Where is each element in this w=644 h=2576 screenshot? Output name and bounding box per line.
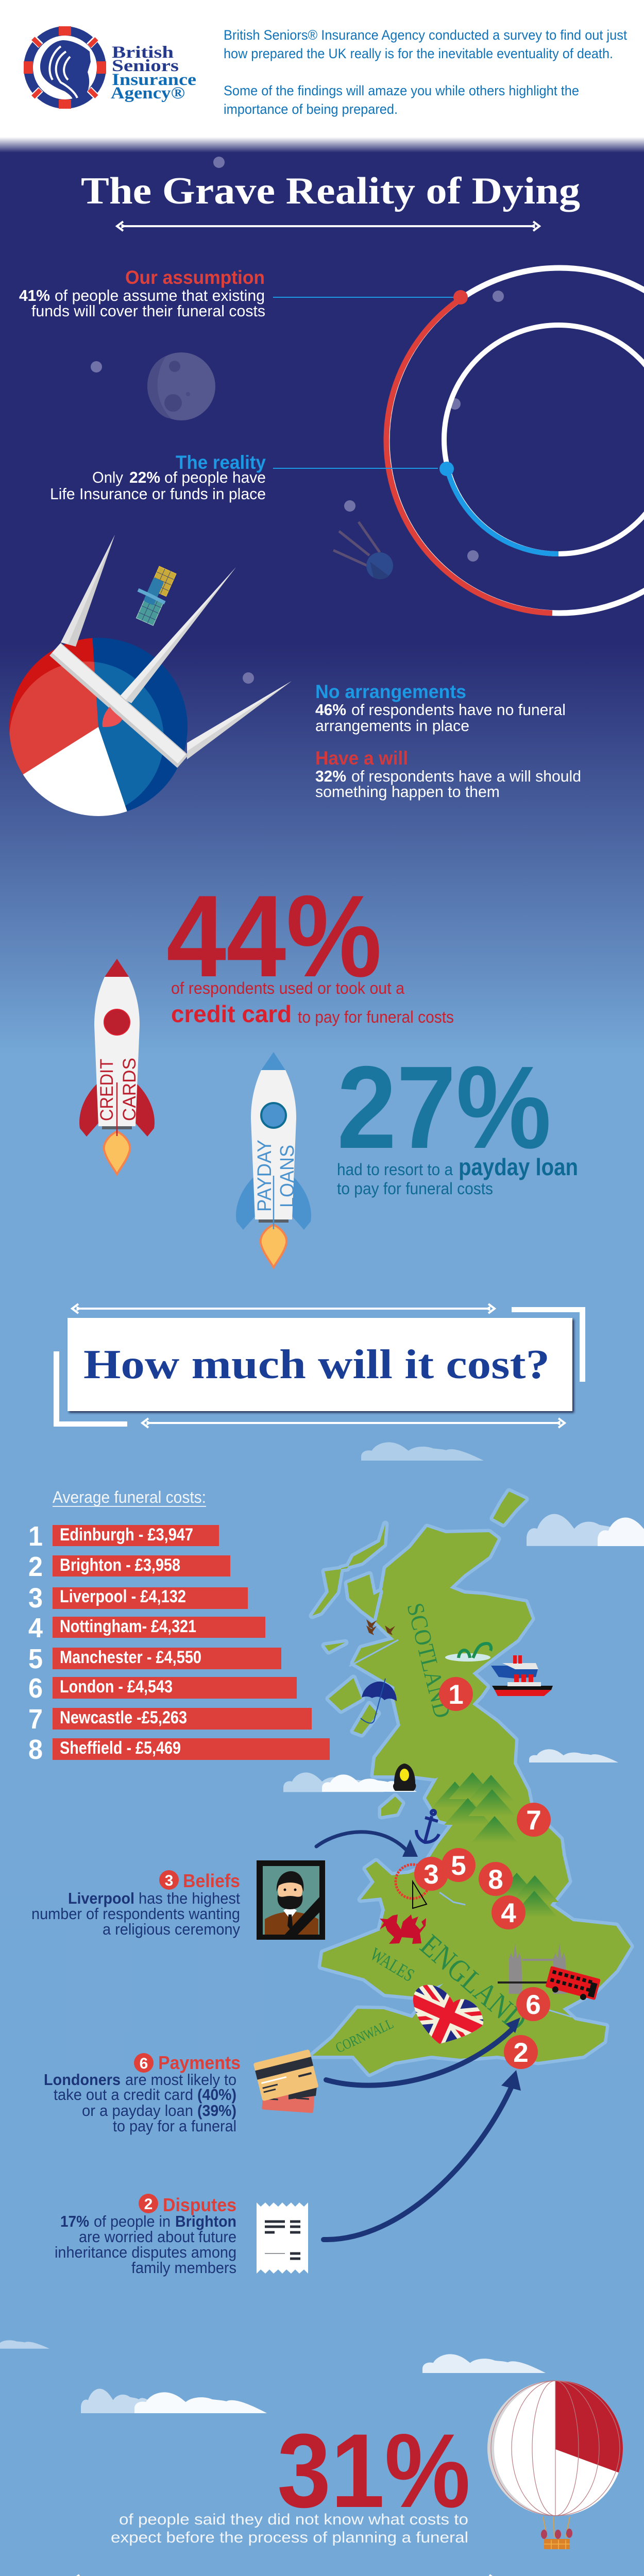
stat: 44 percent credit card <box>166 871 454 1027</box>
icon: credit cards rocket <box>79 959 155 1174</box>
heading panel: How much will it cost? <box>54 1304 585 1428</box>
icon: payday loans rocket <box>236 1052 311 1267</box>
callout: disputes: 17% <box>60 2212 89 2230</box>
bar: Sheffield <box>28 1734 330 1765</box>
icon: police helmet <box>393 1764 416 1791</box>
stat: 31 percent: of people said they did not know what costs to <box>119 2511 468 2528</box>
city markers: 2 <box>513 2038 529 2068</box>
label: SCOTLAND: SCOTLAND <box>402 1600 456 1721</box>
text: the reality: of people have <box>164 468 266 486</box>
callout: payments: 6 <box>140 2055 148 2072</box>
city markers: 6 <box>526 1990 541 2020</box>
stat: 27 percent payday loan: payday loan <box>459 1154 578 1180</box>
text: have a will <box>315 748 581 801</box>
bar: Newcastle <box>28 1704 312 1735</box>
label: CORNWALL: CORNWALL <box>333 2016 396 2056</box>
icon: nessie <box>459 1643 491 1658</box>
icon: umbrella <box>361 1679 397 1723</box>
icon: birds <box>366 1619 395 1635</box>
text: our assumption: Our assumption <box>125 267 265 288</box>
icon: satellite <box>136 566 176 625</box>
text: the reality <box>50 452 266 503</box>
arrow: to Liverpool <box>316 1832 418 1857</box>
text: our assumption <box>19 267 265 320</box>
bar: Edinburgh: 1 <box>28 1521 43 1552</box>
callout: beliefs: a religious ceremony <box>103 1920 240 1938</box>
callout: disputes: 2 <box>144 2196 152 2213</box>
callout: payments <box>44 2052 241 2135</box>
text: no arrangements: No arrangements <box>315 681 466 702</box>
icon: anchor <box>416 1810 439 1842</box>
bar: Manchester: 5 <box>28 1643 43 1674</box>
bar: Newcastle: 7 <box>28 1704 43 1735</box>
city markers <box>414 1677 551 2069</box>
icon: credit cards rocket: CARDS <box>120 1058 140 1121</box>
stat: 44 percent credit card: 44% <box>166 871 382 1001</box>
text: the reality: Life Insurance or funds in place <box>50 485 266 503</box>
callout: payments: (40%) <box>197 2086 236 2104</box>
city markers: 1 <box>448 1680 464 1710</box>
callout: disputes <box>55 2194 236 2277</box>
bar: Nottingham: Nottingham- £4,321 <box>60 1617 196 1636</box>
stat: 31 percent: 31% <box>277 2412 470 2530</box>
callout: disputes: Disputes <box>163 2194 236 2215</box>
icon: memorial portrait <box>257 1860 325 1940</box>
icon: london bus <box>545 1966 601 2003</box>
icon: welsh dragon <box>380 1914 426 1944</box>
clouds around map <box>361 1442 644 1762</box>
title: The Grave Reality of Dying: The Grave Reality of Dying <box>81 170 580 212</box>
text: have a will: Have a will <box>315 748 408 769</box>
callout: beliefs: Beliefs <box>183 1870 240 1891</box>
header: logo: Agency® <box>111 84 185 103</box>
stat: 27 percent payday loan: to pay for funeral costs <box>337 1179 493 1198</box>
stat: 27 percent payday loan: 27% <box>337 1042 551 1173</box>
bar: Liverpool <box>28 1583 248 1614</box>
header: logo <box>24 26 196 109</box>
callout: payments: to pay for a funeral <box>113 2117 236 2135</box>
decorative stars and moon <box>91 157 504 684</box>
label: ENGLAND: ENGLAND <box>414 1928 533 2038</box>
callout: disputes: are worried about future <box>79 2228 236 2246</box>
text: the reality: Only <box>92 468 123 486</box>
header: intro text <box>224 27 627 117</box>
text: the reality: The reality <box>176 452 266 473</box>
text: average funeral costs: Average funeral costs: <box>53 1488 206 1506</box>
callout: disputes: inheritance disputes among <box>55 2243 236 2261</box>
text: our assumption: funds will cover their funeral costs <box>31 302 265 320</box>
callout: disputes: family members <box>131 2259 236 2277</box>
heading panel: Popular send offs <box>55 2575 586 2576</box>
bar: Brighton <box>28 1551 230 1582</box>
header: logo: Insurance <box>112 71 196 89</box>
clouds above balloon <box>0 2337 546 2413</box>
callout: payments: (39%) <box>197 2102 236 2120</box>
callout: disputes: Brighton <box>175 2212 236 2230</box>
bar: Liverpool: Liverpool - £4,132 <box>60 1587 186 1606</box>
bar: Sheffield: Sheffield - £5,469 <box>60 1738 181 1758</box>
bar: Newcastle: Newcastle -£5,263 <box>60 1708 187 1727</box>
title: The Grave Reality of Dying <box>81 170 580 231</box>
text: the reality: 22% <box>129 468 160 486</box>
bar: Edinburgh <box>28 1521 219 1552</box>
bar chart: costs by city <box>28 1521 330 1765</box>
text: no arrangements: of respondents have no funeral <box>351 701 566 719</box>
label: WALES: WALES <box>367 1944 418 1986</box>
icon: hot air balloon pie <box>487 2380 623 2549</box>
rings chart: assumption vs reality <box>273 268 644 613</box>
text: our assumption: 41% <box>19 286 50 304</box>
callout: beliefs <box>31 1870 240 1938</box>
city markers: 7 <box>526 1805 541 1836</box>
icon: credit cards rocket: CREDIT <box>97 1059 117 1121</box>
stat: 31 percent <box>111 2412 470 2546</box>
text: have a will: something happen to them <box>315 783 500 801</box>
header: intro text: importance of being prepared. <box>224 101 398 117</box>
callout: beliefs: 3 <box>165 1872 173 1889</box>
bar: Brighton: Brighton - £3,958 <box>60 1555 180 1575</box>
text: have a will: 32% <box>315 767 346 785</box>
city markers: 4 <box>501 1898 516 1928</box>
icon: union jack heart <box>413 1985 483 2044</box>
stat: 27 percent payday loan: had to resort to a <box>337 1160 453 1179</box>
callout: disputes: of people in <box>94 2212 171 2230</box>
bar: Brighton: 2 <box>28 1551 43 1582</box>
bar: London: 6 <box>28 1673 43 1704</box>
chart: satellite dish pie <box>9 535 292 816</box>
icon: london eye <box>396 1865 430 1908</box>
city markers: 5 <box>451 1851 466 1881</box>
bar: Sheffield: 8 <box>28 1734 43 1765</box>
map: United Kingdom <box>312 1492 631 2084</box>
text: no arrangements: arrangements in place <box>315 717 469 735</box>
callout: payments: or a payday loan <box>82 2102 193 2120</box>
bar: Manchester: Manchester - £4,550 <box>60 1648 201 1667</box>
header: intro text: British Seniors® Insurance Agency conducted a survey to find out just <box>224 27 627 43</box>
city markers: 8 <box>488 1865 503 1895</box>
callout: payments: are most likely to <box>125 2071 236 2089</box>
clouds over map <box>283 1764 417 1792</box>
icon: credit cards <box>253 2049 319 2113</box>
map mountains <box>431 1772 558 1918</box>
bar: Nottingham: 4 <box>28 1613 43 1643</box>
bar: Edinburgh: Edinburgh - £3,947 <box>60 1525 193 1545</box>
header: intro text: how prepared the UK really is for the inevitable eventuality of death. <box>224 46 613 61</box>
heading panel: How much will it cost?: How much will it cost? <box>83 1342 550 1387</box>
text: have a will: of respondents have a will should <box>351 767 581 785</box>
header: logo: British <box>112 43 174 62</box>
callout: payments: Londoners <box>44 2071 121 2089</box>
bar: Nottingham <box>28 1613 265 1643</box>
bar: Liverpool: 3 <box>28 1583 43 1614</box>
bar: London: London - £4,543 <box>60 1677 173 1697</box>
stat: 44 percent credit card: credit card <box>171 1001 292 1027</box>
text: no arrangements: 46% <box>315 701 346 719</box>
arrow: to London <box>326 2018 520 2086</box>
stat: 44 percent credit card: of respondents used or took out a <box>171 979 404 997</box>
icon: payday loans rocket: PAYDAY <box>254 1140 276 1212</box>
stat: 31 percent: expect before the process of planning a funeral <box>111 2529 468 2546</box>
text: our assumption: of people assume that existing <box>55 286 265 304</box>
text: no arrangements <box>315 681 566 735</box>
header: logo: Seniors <box>112 57 179 75</box>
callout: beliefs: has the highest <box>139 1889 240 1907</box>
icon: payday loans rocket: LOANS <box>277 1145 298 1208</box>
callout: payments: take out a credit card <box>54 2086 193 2104</box>
bar: Manchester <box>28 1643 281 1674</box>
icon: tower bridge <box>498 1943 567 1994</box>
callout: payments: Payments <box>158 2052 241 2073</box>
bar: London <box>28 1673 297 1704</box>
callout: beliefs: number of respondents wanting <box>31 1905 240 1923</box>
header: intro text: Some of the findings will amaze you while others highlight the <box>224 83 579 98</box>
arrow: to Brighton <box>324 2070 521 2240</box>
city markers: 3 <box>423 1859 439 1890</box>
callout: beliefs: Liverpool <box>68 1889 134 1907</box>
icon: ships <box>491 1655 553 1696</box>
icon: receipt <box>257 2202 308 2274</box>
icon: sputnik <box>333 522 393 579</box>
stat: 44 percent credit card: to pay for funeral costs <box>298 1008 454 1026</box>
